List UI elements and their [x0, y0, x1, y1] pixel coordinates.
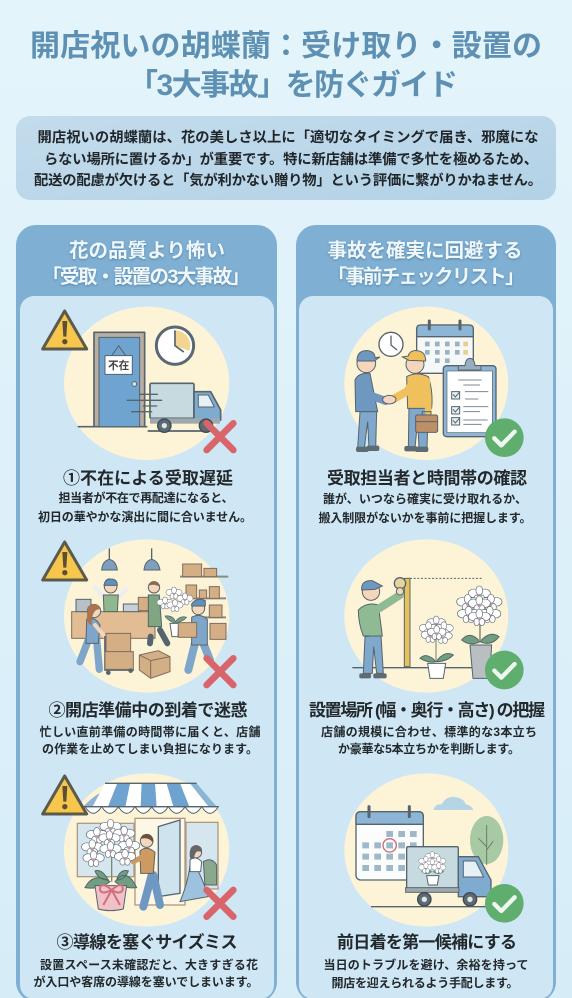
illustration: day-before delivery	[344, 773, 524, 927]
illustration: handshake	[344, 307, 524, 460]
icon: cross	[207, 658, 233, 685]
check item 2 text	[309, 700, 545, 756]
heading right: 「事前チェックリスト」	[328, 266, 524, 288]
illustration: arrival during prep	[43, 539, 233, 693]
item 2 text: 忙しい直前準備の時間帯に届くと、店舗	[40, 724, 260, 739]
check item 1 text	[318, 469, 532, 525]
icon: cross	[207, 423, 233, 450]
intro text box	[16, 116, 556, 200]
check item 3 text: 開店を迎えられるよう手配します。	[332, 975, 518, 990]
check item 1 text: 受取担当者と時間帯の確認	[327, 469, 527, 488]
check item 1 text: 搬入制限がないかを事前に把握します。	[318, 510, 532, 525]
panel frame right	[296, 225, 556, 998]
item 2 text: の作業を止めてしまい負担になります。	[42, 741, 258, 756]
title: 「3大事故」を防ぐガイド	[128, 69, 458, 102]
intro text box: 配送の配慮が欠けると「気が利かない贈り物」という評価に繋がりかねません。	[34, 171, 542, 189]
illustration: oversized flowers	[43, 773, 233, 927]
check item 2 text: か豪華な5本立ちかを判断します。	[338, 741, 520, 756]
icon: warning	[43, 311, 87, 349]
panel: 3 accidents	[16, 225, 277, 998]
inner panel left	[20, 296, 274, 998]
check item 3 text: 当日のトラブルを避け、余裕を持って	[324, 957, 528, 972]
icon: cross	[207, 890, 233, 917]
intro text box: らない場所に置けるか」が重要です。特に新店舗は準備で多忙を極めるため、	[44, 150, 538, 168]
icon: check	[485, 418, 524, 457]
heading right	[328, 240, 524, 288]
item 1 text: 初日の華やかな演出に間に合いません。	[38, 509, 252, 524]
icon: warning	[43, 542, 87, 580]
item 2 text	[40, 700, 260, 756]
icon: warning	[43, 776, 87, 814]
icon: check	[485, 884, 524, 923]
check item 1 text: 誰が、いつなら確実に受け取れるか、	[323, 491, 527, 506]
illustration: measuring space	[344, 539, 524, 693]
check item 2 text: 店舗の規模に合わせ、標準的な3本立ち	[321, 724, 537, 739]
check item 3 text: 前日着を第一候補にする	[337, 932, 517, 952]
item 3 text: が入口や客席の導線を塞いでしまいます。	[34, 974, 258, 989]
heading left: 花の品質より怖い	[69, 239, 225, 262]
item 1 text: 担当者が不在で再配達になると、	[58, 490, 234, 505]
check item 2 text: 設置場所 (幅・奥行・高さ) の把握	[309, 700, 545, 720]
heading left	[42, 239, 250, 288]
heading left: 「受取・設置の3大事故」	[42, 265, 250, 288]
panel frame left	[16, 225, 277, 998]
heading right: 事故を確実に回避する	[328, 240, 522, 262]
item 2 text: ②開店準備中の到着で迷惑	[48, 700, 248, 720]
intro text box: 開店祝いの胡蝶蘭は、花の美しさ以上に「適切なタイミングで届き、邪魔にな	[38, 128, 538, 146]
illustration: absence delivery	[43, 307, 233, 460]
item 3 text: ③導線を塞ぐサイズミス	[56, 932, 238, 952]
illustration: absence delivery: 不在	[108, 359, 130, 372]
icon: check	[485, 651, 524, 689]
check item 3 text	[324, 932, 528, 990]
item 1 text: ①不在による受取遅延	[63, 469, 233, 488]
item 1 text	[38, 469, 252, 524]
title	[30, 30, 542, 102]
item 3 text: 設置スペース未確認だと、大きすぎる花	[40, 957, 258, 972]
panel: checklist	[296, 225, 556, 998]
item 3 text	[34, 932, 258, 989]
title: 開店祝いの胡蝶蘭：受け取り・設置の	[30, 30, 542, 63]
inner panel right	[299, 296, 553, 998]
